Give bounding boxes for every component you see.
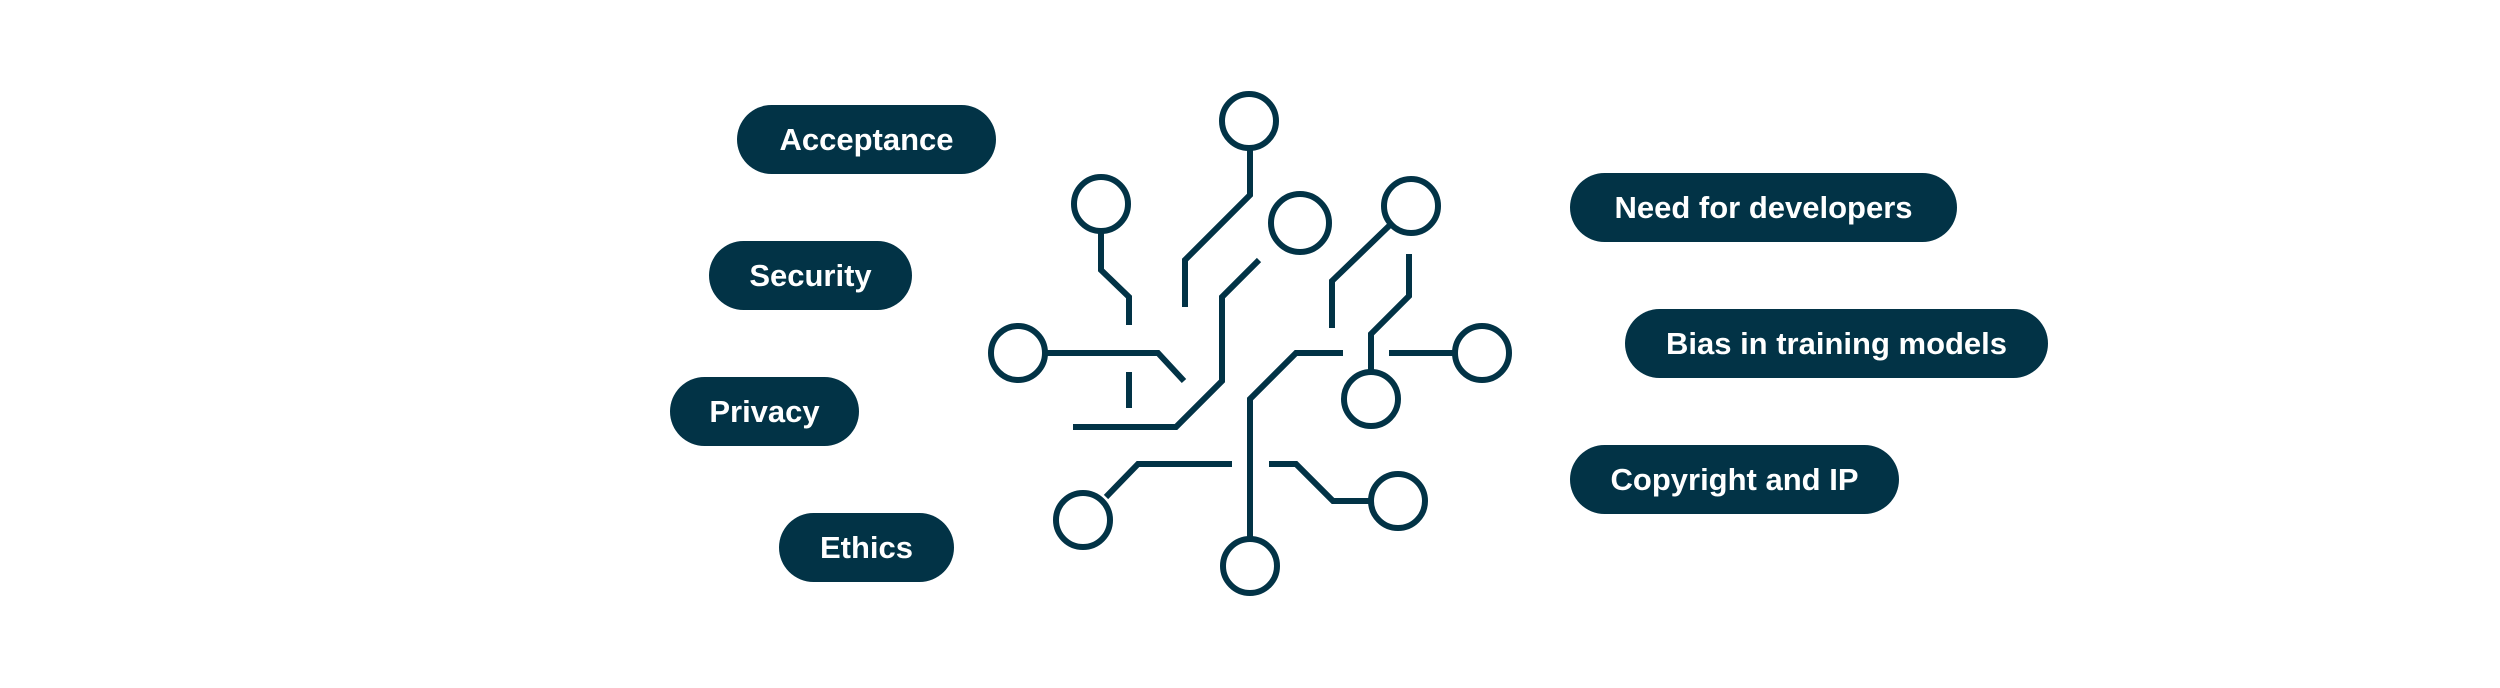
pill: Copyright and IP: Copyright and IP bbox=[1610, 462, 1858, 496]
pill: Security bbox=[709, 241, 912, 310]
pill: Need for developers bbox=[1570, 173, 1957, 242]
pill: Need for developers: Need for developers bbox=[1614, 190, 1913, 224]
pill: Ethics: Ethics bbox=[820, 530, 913, 564]
pill: Privacy bbox=[670, 377, 859, 446]
pill: Bias in training models: Bias in training models bbox=[1666, 326, 2007, 360]
pill: Bias in training models bbox=[1625, 309, 2048, 378]
pill: Acceptance: Acceptance bbox=[779, 122, 954, 156]
pill: Ethics bbox=[779, 513, 954, 582]
pill: Acceptance bbox=[737, 105, 996, 174]
pill: Privacy: Privacy bbox=[709, 394, 820, 428]
pill: Security: Security bbox=[749, 258, 872, 292]
pill: Copyright and IP bbox=[1570, 445, 1899, 514]
